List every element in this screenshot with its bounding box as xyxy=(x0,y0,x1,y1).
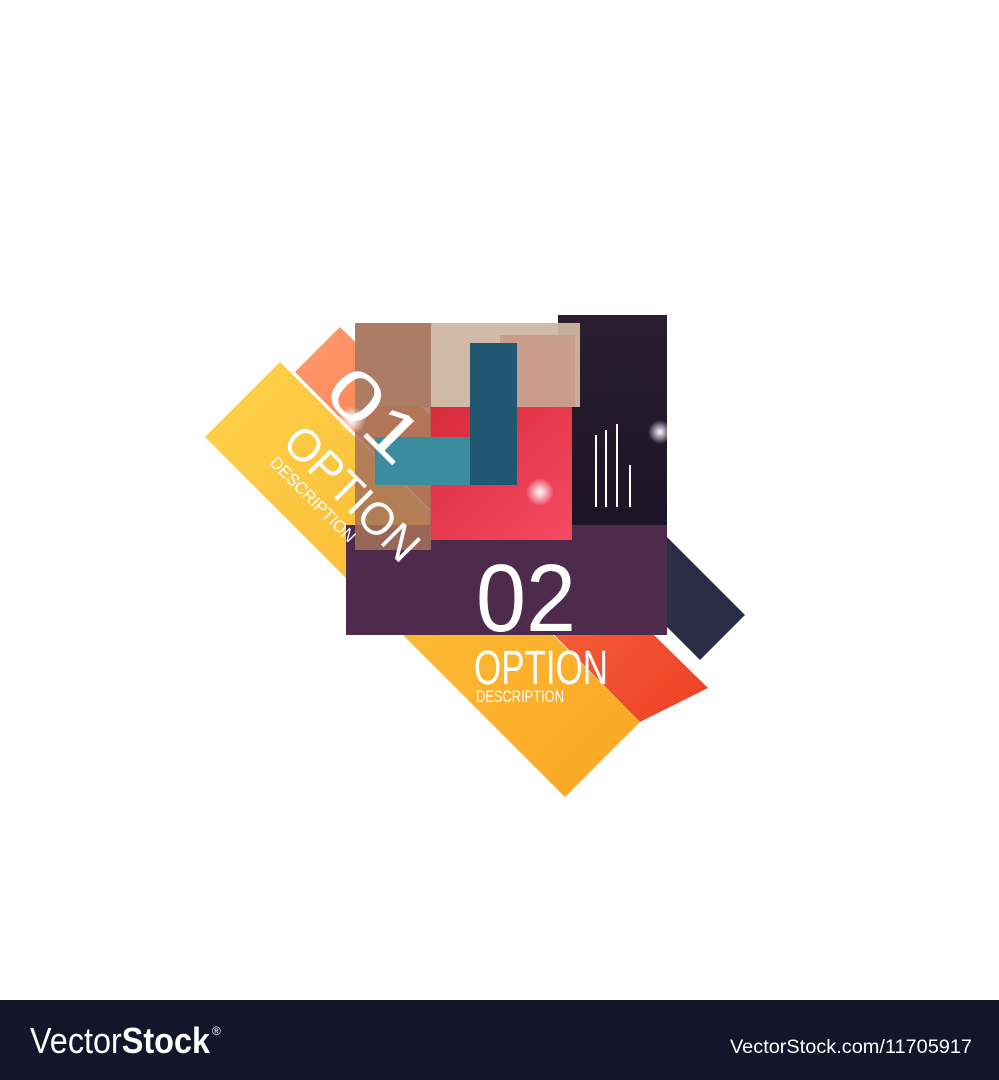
text: option 02 xyxy=(474,545,608,706)
panel: pink xyxy=(500,335,575,407)
text: option 02: DESCRIPTION xyxy=(476,687,564,706)
text: option 01: 01 xyxy=(310,351,438,479)
text: option 01: OPTION xyxy=(274,415,431,572)
footer xyxy=(0,1000,999,1080)
panel: red square xyxy=(430,407,572,540)
band: navy xyxy=(560,475,745,660)
text: option 02: 02 xyxy=(476,545,576,652)
panel: purple xyxy=(346,525,667,635)
panel: beige xyxy=(355,323,580,407)
text: option 01 xyxy=(257,351,489,583)
footer: ® xyxy=(212,1024,221,1038)
band: red xyxy=(295,327,708,722)
icon: sparkles xyxy=(338,406,672,506)
text: option 02: OPTION xyxy=(474,642,608,695)
text: option 01: DESCRIPTION xyxy=(266,453,359,546)
band: yellow xyxy=(205,362,640,797)
icon: teal L shape xyxy=(375,343,517,485)
icon: vertical bars xyxy=(596,424,630,507)
footer: VectorStock xyxy=(30,1020,211,1061)
footer: VectorStock.com/11705917 xyxy=(730,1037,972,1058)
panel: dark vertical xyxy=(558,315,667,635)
panel: brown vertical xyxy=(355,323,431,550)
